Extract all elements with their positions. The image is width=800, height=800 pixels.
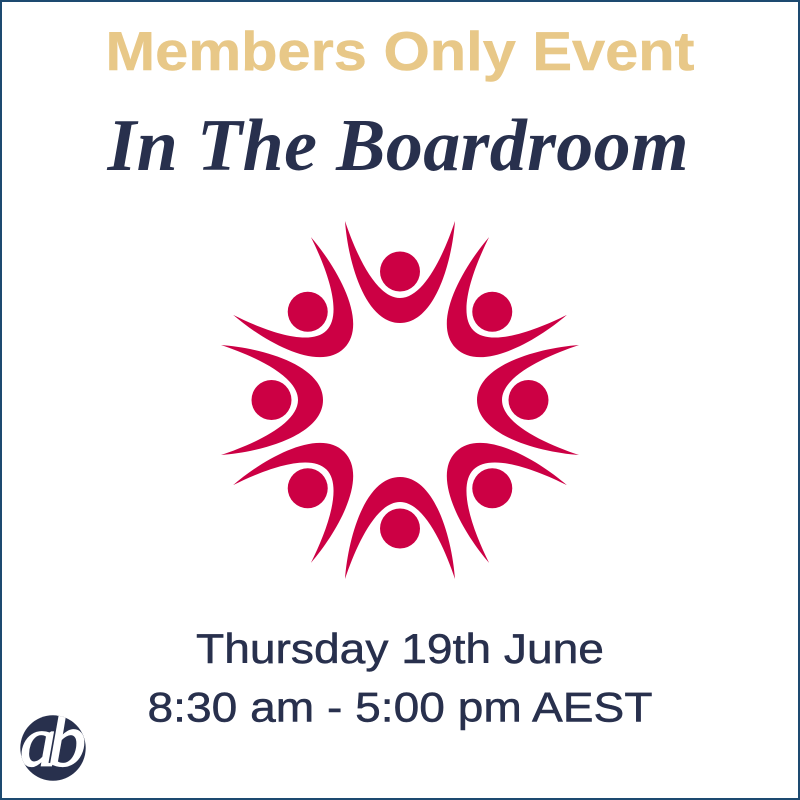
title: In The Boardroom: In The Boardroom	[106, 105, 688, 187]
heading: Members Only Event: Members Only Event	[106, 20, 694, 82]
icon: ab logo: a	[20, 702, 56, 782]
icon: ab logo: b	[48, 699, 86, 783]
text: event time: 8:30 am - 5:00 pm AEST	[148, 684, 652, 730]
icon: ab logo	[20, 715, 86, 781]
text: event date: Thursday 19th June	[196, 625, 604, 672]
icon: circle of eight people	[221, 221, 579, 579]
